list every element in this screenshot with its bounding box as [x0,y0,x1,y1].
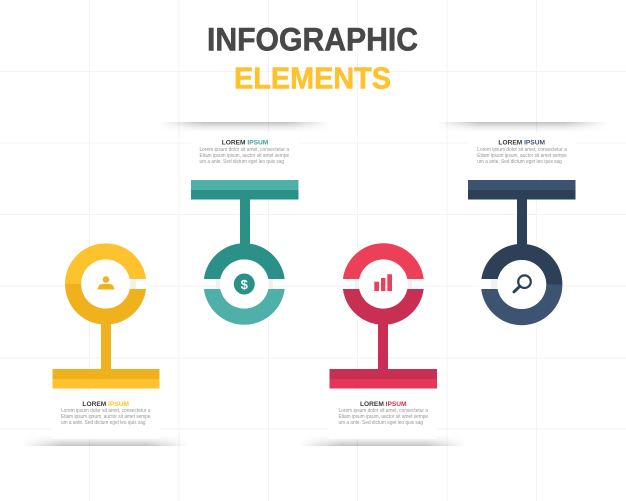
red text panel: um a ante. Sed dictum eget leo quis sag [338,420,423,426]
red text panel [329,391,437,439]
title: infographic elements: INFOGRAPHIC [207,22,418,58]
shadow: red text panel [306,438,460,446]
icon: person [97,276,115,290]
navy top bar [468,180,576,200]
teal connector stem [240,199,250,247]
navy text panel: Lorem ipsum dolor sit amet, consectetur a [477,147,567,153]
red base bar [330,369,437,388]
navy text panel [468,132,576,179]
icon: bar chart [374,274,392,291]
icon: dollar coin [234,274,255,294]
red ring [343,243,424,325]
navy ring [479,244,562,325]
yellow text panel: um a ante. Sed dictum eget leo quis sag [61,420,146,426]
yellow text panel: Etiam ipsum ipsum, auctor sit amet sempe [61,414,151,420]
teal top bar [191,180,298,200]
panel: red step [329,243,437,439]
teal text panel: um a ante. Sed dictum eget leo quis sag [200,159,284,165]
icon: dollar coin: $ [241,277,249,292]
navy text panel: Etiam ipsum ipsum, auctor sit amet sempe [477,153,567,159]
teal ring [204,243,285,325]
yellow text panel: Lorem ipsum dolor sit amet, consectetur a [61,408,151,414]
shadow: navy text panel [443,122,601,130]
red text panel: Etiam ipsum ipsum, auctor sit amet sempe [338,414,428,420]
teal text panel: Etiam ipsum ipsum, auctor sit amet sempe [200,153,289,159]
yellow text panel [52,391,160,439]
teal text panel [191,132,299,179]
navy connector stem [517,199,527,247]
icon: magnifying glass [514,275,531,292]
yellow base bar [52,369,160,388]
panel: teal step [191,132,299,325]
yellow connector stem [101,322,111,370]
title: infographic elements: ELEMENTS [234,60,391,95]
navy text panel: um a ante. Sed dictum eget leo quis sag [477,159,562,165]
teal text panel: Lorem ipsum dolor sit amet, consectetur a [200,147,289,153]
navy text panel: LOREM IPSUM [498,140,545,147]
yellow ring [65,243,148,325]
red connector stem [378,322,388,370]
shadow: yellow text panel [28,438,182,446]
red text panel: Lorem ipsum dolor sit amet, consectetur a [338,408,428,414]
red text panel: LOREM IPSUM [360,401,407,408]
yellow text panel: LOREM IPSUM [82,401,129,408]
title: infographic elements [207,22,418,95]
shadow: teal text panel [166,122,324,130]
teal text panel: LOREM IPSUM [222,140,269,147]
panel: yellow step [52,243,160,439]
panel: navy step [468,132,576,325]
